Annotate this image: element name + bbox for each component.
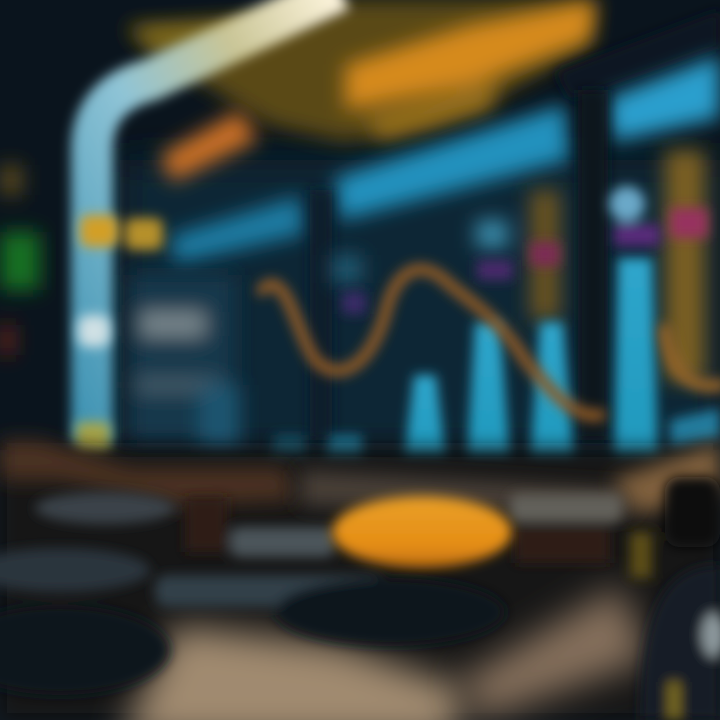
dark columns [310, 90, 608, 440]
orange roof structure [125, 0, 595, 182]
pipe marker: white dot [78, 315, 110, 347]
roof highlight: orange stripes [130, 0, 595, 140]
roof accent: orange wedge [160, 110, 258, 182]
left edge chart [0, 165, 40, 355]
top right dark beam [555, 10, 720, 100]
stacked dark objects [0, 492, 622, 695]
blue horizontal bands [170, 55, 720, 264]
orange disc [332, 496, 512, 568]
dark foreground object right [630, 477, 720, 720]
wavy orange line chart [262, 269, 720, 416]
cyan bar chart [270, 258, 720, 465]
muted background panel details [130, 150, 705, 450]
pipe marker: yellow base [76, 422, 110, 456]
pipe with curved top [76, 0, 340, 456]
table and floor [0, 440, 720, 720]
pipe marker: yellow band [80, 215, 163, 250]
bar markers [342, 186, 708, 314]
